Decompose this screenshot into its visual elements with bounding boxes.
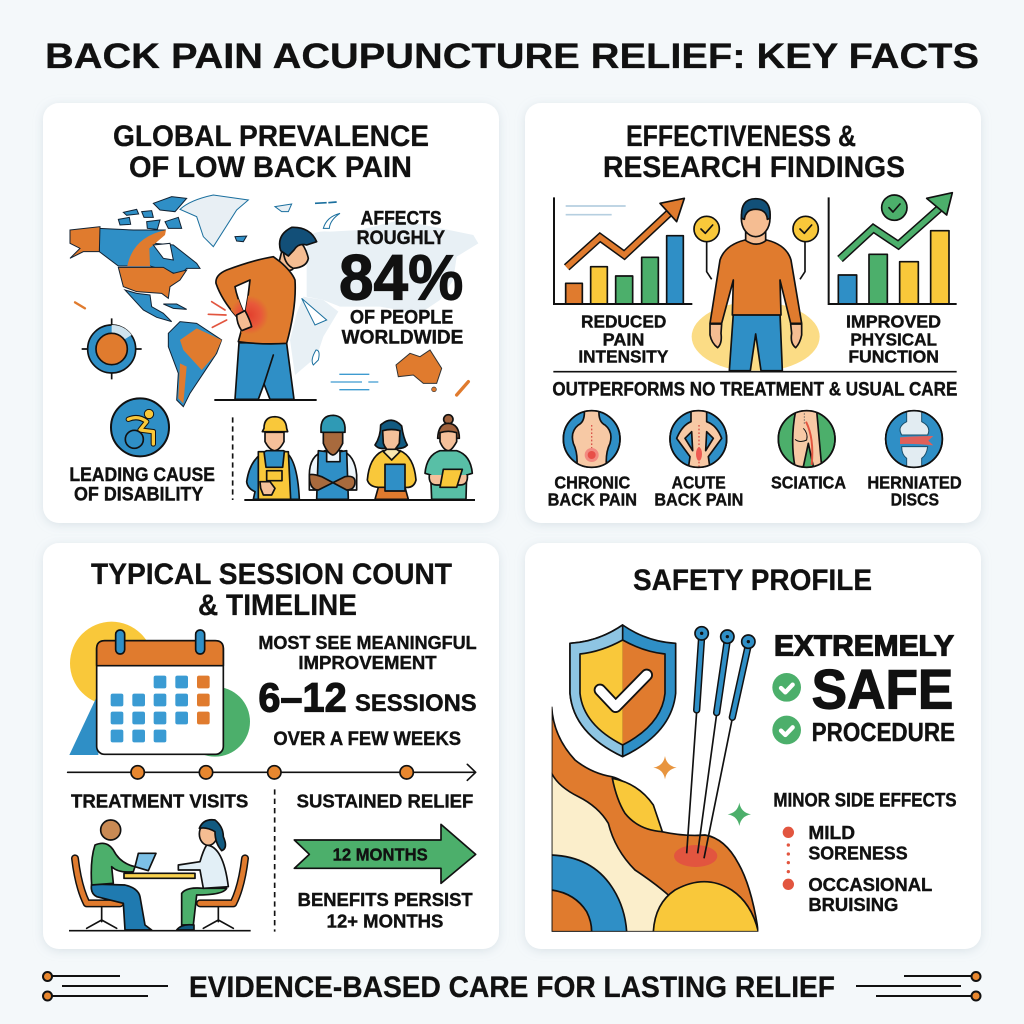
stat: 84 percent: WORLDWIDE [342,327,463,348]
footer decoration left [43,972,168,1000]
icon: sciatica [778,411,835,467]
text: leading cause of disability: LEADING CAUSE [69,465,215,486]
text: leading cause of disability [69,465,215,506]
text: sustained relief: SUSTAINED RELIEF [297,790,473,811]
text: reduced pain intensity: REDUCED [581,312,666,332]
text: improved physical function: PHYSICAL [850,329,937,349]
text: sessions stat [258,632,477,750]
arrow: 12 months [294,824,476,883]
footer decoration right [856,972,980,1000]
text: improved physical function: IMPROVED [846,312,941,332]
icon: herniated discs [886,411,942,468]
text: sessions stat: 6–12 [258,675,347,721]
text: sessions stat: MOST SEE MEANINGFUL [258,632,477,653]
figure: person holding lower back [208,227,317,400]
figure: standing person [692,199,820,372]
chart: reduced pain intensity [554,197,692,304]
list: side effects: OCCASIONAL [808,874,932,895]
labels: conditions: SCIATICA [771,472,846,492]
icon: wheelchair [111,398,169,456]
text: benefits persist [298,889,473,931]
text: outperforms: OUTPERFORMS NO TREATMENT & USUAL CARE [552,380,957,401]
icon: target [82,318,142,379]
figure: consultation scene [69,820,251,931]
text: benefits persist: 12+ MONTHS [327,910,443,931]
labels: conditions: BACK PAIN [654,490,743,510]
text: sessions stat: SESSIONS [355,690,477,717]
text: sessions stat: IMPROVEMENT [298,652,437,673]
icon: green sparkle [728,803,751,826]
heading: effectiveness: RESEARCH FINDINGS [603,151,905,184]
text: improved physical function [846,312,941,367]
list: side effects [783,822,932,915]
list: side effects: BRUISING [808,894,898,915]
heading: effectiveness: EFFECTIVENESS & [626,120,856,153]
figure: nurse with clipboard [425,415,472,499]
icon: check one [772,673,801,702]
text: minor side effects: MINOR SIDE EFFECTS [773,791,957,812]
illustration: body with needles [552,627,758,932]
title: BACK PAIN ACUPUNCTURE RELIEF: KEY FACTS [45,37,979,76]
heading: session count [91,558,452,622]
map: australia and lines [331,350,468,395]
figure: woman with folder [367,420,416,499]
stat: 84 percent: AFFECTS [361,208,442,229]
heading: effectiveness [603,120,905,184]
text: reduced pain intensity: PAIN [603,329,644,349]
panel: global prevalence [43,103,499,523]
figure: worker with arms crossed [309,415,357,499]
text: reduced pain intensity: INTENSITY [578,347,668,367]
heading: session count: TYPICAL SESSION COUNT [91,558,452,591]
heading: session count: & TIMELINE [198,589,357,622]
timeline arrow [68,764,476,780]
heading: global prevalence: GLOBAL PREVALENCE [113,120,429,153]
icon: check two [772,716,801,744]
icon: chronic back pain [563,411,620,468]
text: sessions stat: OVER A FEW WEEKS [273,729,461,750]
arrow: 12 months: 12 MONTHS [333,844,428,864]
text: extremely safe procedure [774,631,955,747]
world map [70,195,478,407]
icon: yellow check right [793,216,818,279]
panel: effectiveness [525,103,981,523]
stat: 84 percent: ROUGHLY [357,228,445,249]
labels: conditions: CHRONIC [554,472,630,492]
heading: global prevalence [113,120,429,184]
labels: conditions: HERNIATED [867,472,962,492]
labels: conditions: ACUTE [672,472,726,492]
icon: shield [570,625,676,757]
footer text: EVIDENCE-BASED CARE FOR LASTING RELIEF [189,971,835,1004]
text: benefits persist: BENEFITS PERSIST [298,889,473,910]
text: treatment visits: TREATMENT VISITS [71,790,248,811]
chart: improved physical function [829,193,957,304]
icon: orange sparkle [653,756,677,779]
text: reduced pain intensity [578,312,668,367]
stat: 84 percent: 84% [339,241,463,313]
stat: 84 percent [339,208,463,348]
text: leading cause of disability: OF DISABILITY [74,485,203,506]
figure: worker in hard hat [247,417,299,499]
text: improved physical function: FUNCTION [848,347,939,367]
text: extremely safe procedure: EXTREMELY [774,631,954,663]
heading: global prevalence: OF LOW BACK PAIN [129,151,412,184]
labels: conditions: DISCS [891,490,939,510]
panel: safety profile [525,543,981,949]
labels: conditions: BACK PAIN [548,490,637,510]
icon: calendar [69,622,250,757]
labels: conditions [548,472,962,510]
heading: safety profile: SAFETY PROFILE [633,564,872,597]
panel: session count [43,543,499,949]
text: extremely safe procedure: PROCEDURE [812,719,955,747]
stat: 84 percent: OF PEOPLE [350,307,453,328]
text: extremely safe procedure: SAFE [812,658,953,720]
icon: acute back pain [670,411,727,468]
list: side effects: SORENESS [808,842,908,863]
icon: yellow check left [694,216,719,279]
list: side effects: MILD [808,822,855,843]
